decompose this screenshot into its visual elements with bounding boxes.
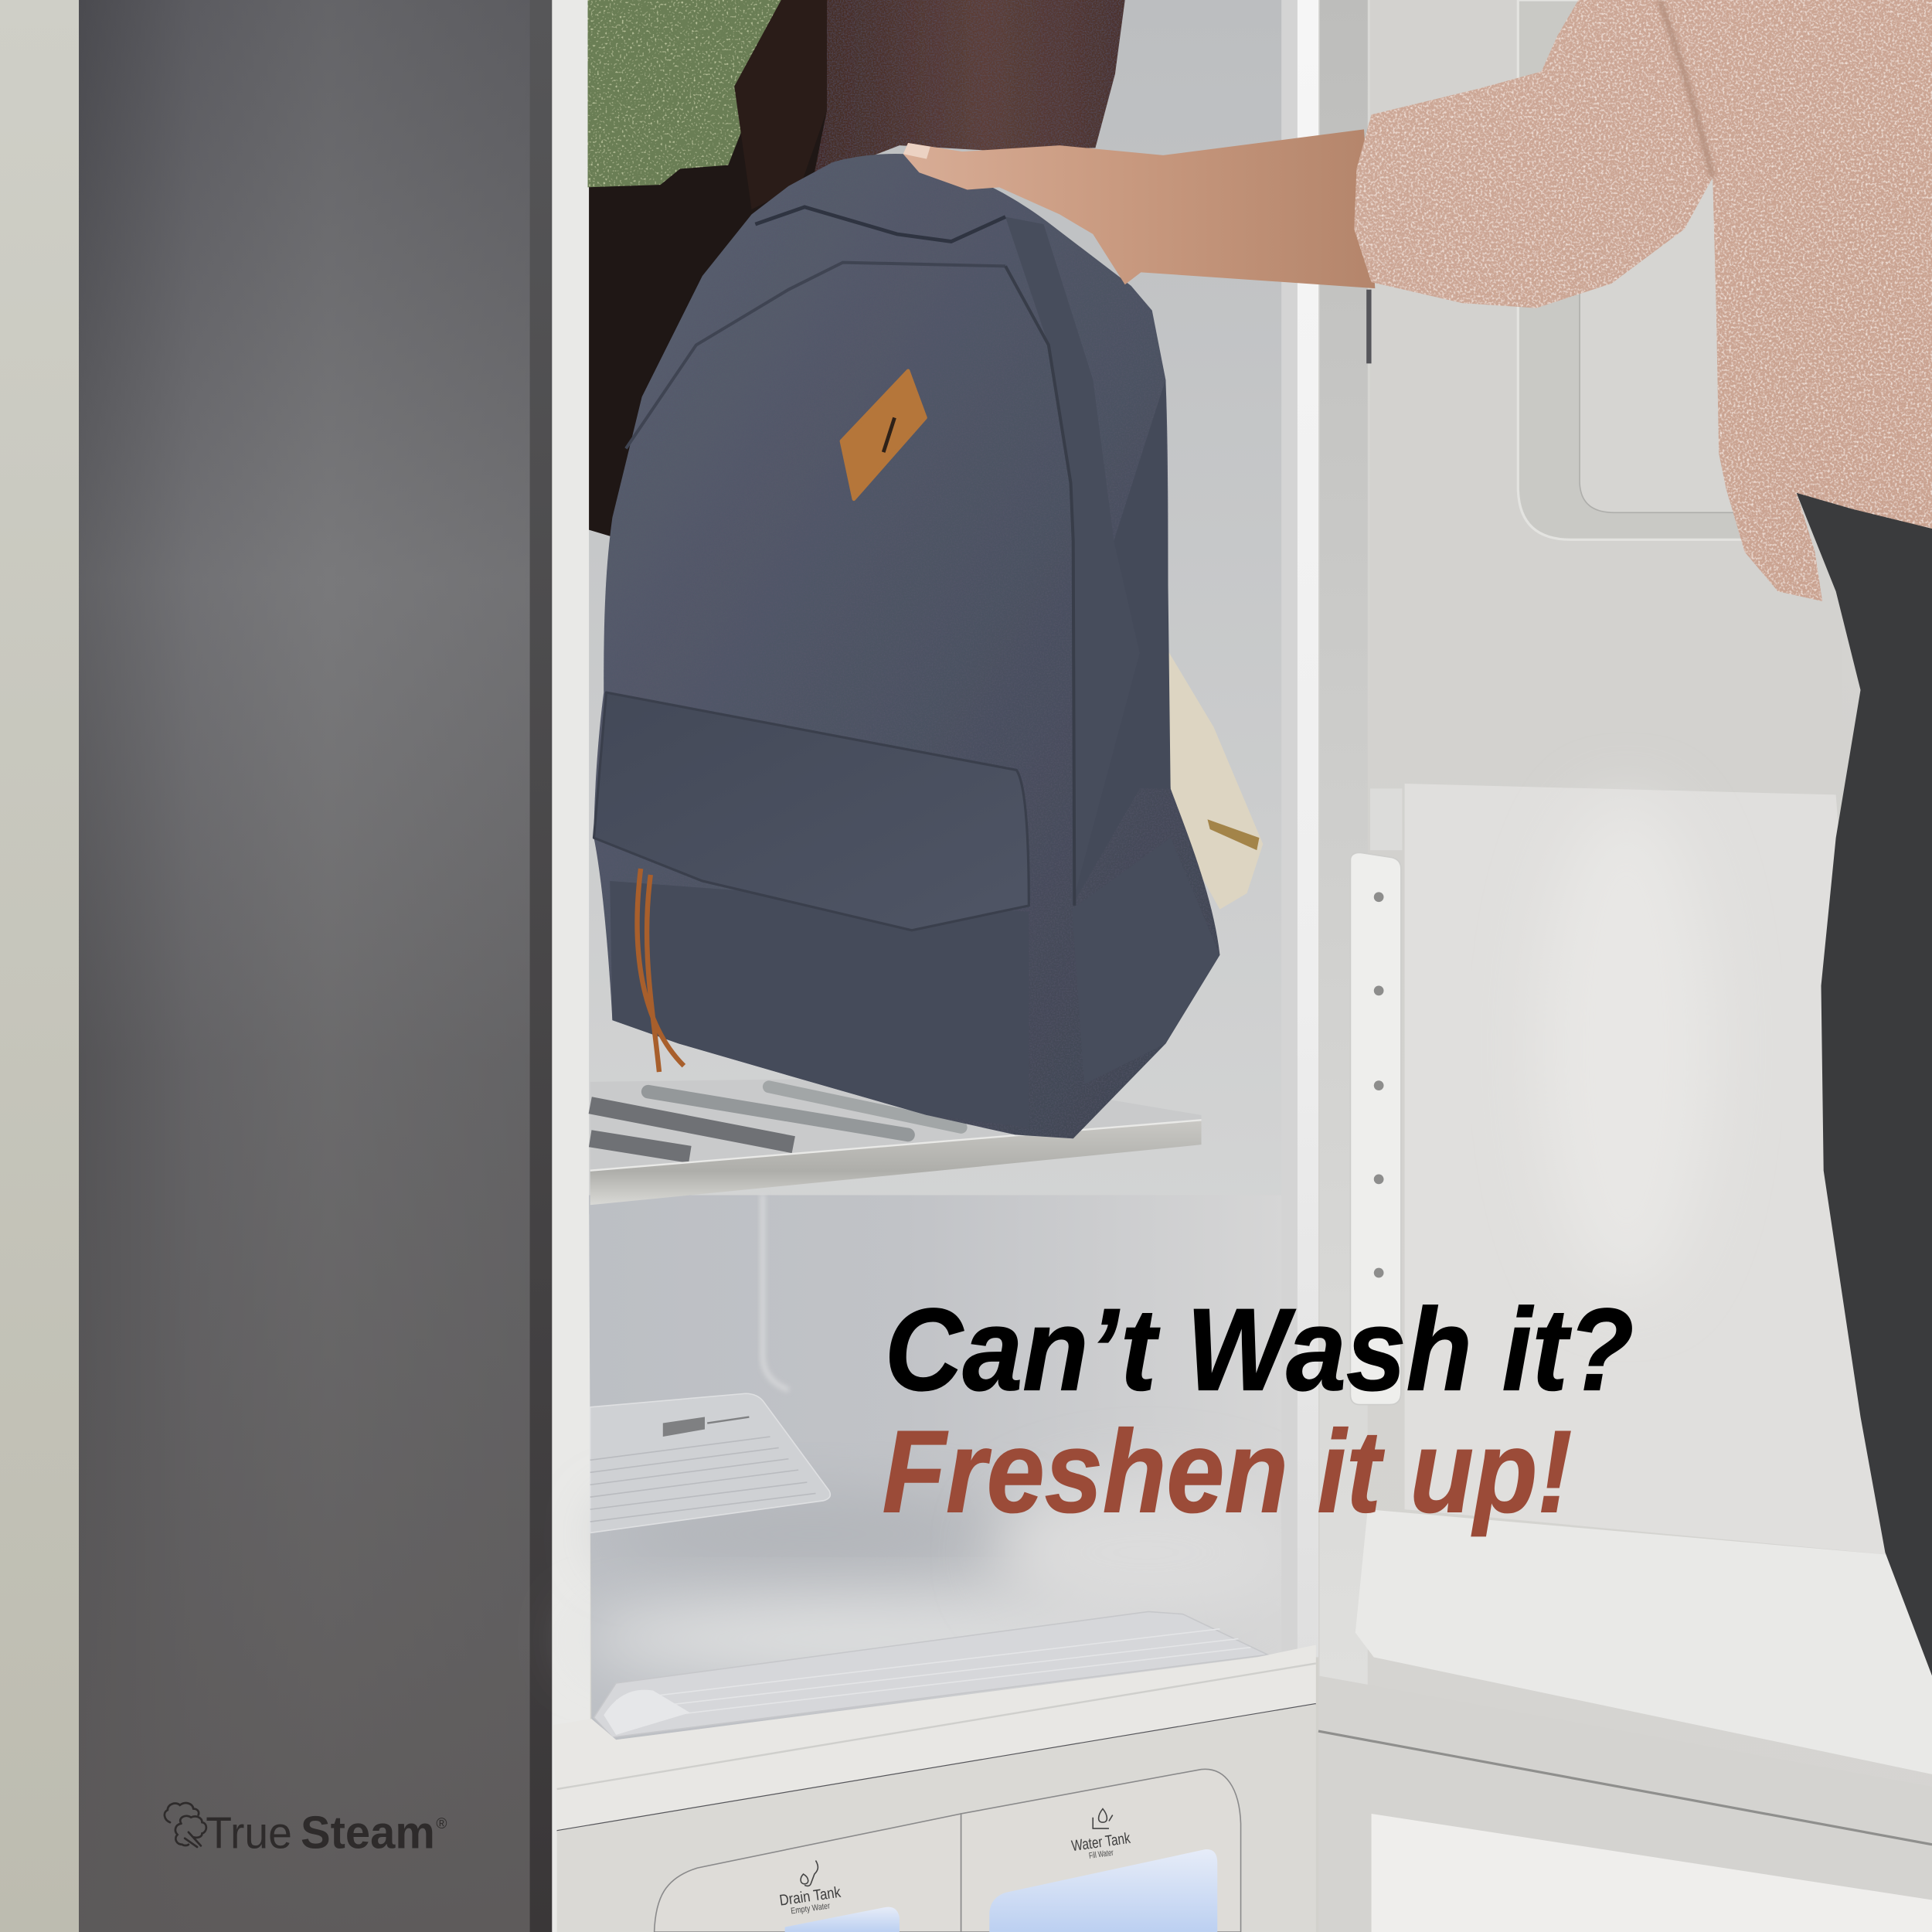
- strap seam: [1005, 266, 1074, 906]
- side panel shading: [1072, 379, 1171, 906]
- door tray: [1355, 1509, 1932, 1774]
- drain tank sublabel: Empty Water: [791, 1901, 831, 1916]
- sweater fold shading: [1660, 0, 1713, 178]
- panel: upper cabinet interior: [589, 0, 1289, 1213]
- door handle recess: [1518, 0, 1750, 539]
- logo: TrueSteam: ®: [436, 1816, 447, 1832]
- panel: lower cabinet interior: [579, 1194, 1294, 1740]
- thumbnail: [903, 143, 930, 159]
- brown leather jacket: [813, 0, 1125, 179]
- floor highlight: [579, 1602, 1146, 1675]
- logo: TrueSteam: [165, 1803, 447, 1859]
- side pocket: [1072, 838, 1219, 1084]
- panel: cabinet frame strip: [552, 0, 590, 1932]
- front panel seam: [626, 263, 1005, 448]
- headline line 1: Can’t Wash it?: [885, 1284, 1634, 1415]
- backpack: [594, 154, 1263, 1138]
- brand wordmark: True: [206, 1809, 292, 1859]
- right floor light: [998, 1478, 1294, 1627]
- icon: steam cloud: [165, 1803, 206, 1847]
- lower door panel: [1405, 784, 1891, 1555]
- brass buckle: [1207, 819, 1259, 850]
- upper door bin: [1370, 0, 1842, 794]
- green jacket: [588, 0, 781, 187]
- panel: front sill: [553, 1645, 1316, 1831]
- leather patch: [842, 371, 925, 499]
- panel: water and drain tank controls: [557, 1704, 1316, 1932]
- panel: drain tank: [655, 1814, 961, 1932]
- canvas strap: [1152, 634, 1263, 910]
- lower door drawer: [1372, 1814, 1932, 1932]
- main body: [594, 154, 1219, 1138]
- front pocket: [610, 881, 1029, 1128]
- leather dark edge: [734, 0, 827, 209]
- back corner seam: [763, 1194, 788, 1389]
- jeans: [1797, 493, 1932, 1675]
- water tank label: Water Tank: [1070, 1830, 1131, 1855]
- shoulder strap shading: [1005, 217, 1140, 906]
- drain tray: [594, 1611, 1268, 1737]
- headline line 2: Freshen it up!: [883, 1406, 1572, 1537]
- wall: [0, 0, 81, 1932]
- pocket flap: [594, 692, 1029, 930]
- sweater: [1354, 0, 1932, 601]
- panel: water tank: [961, 1769, 1241, 1932]
- lower door ledge: [1318, 1675, 1932, 1932]
- drawcord: [638, 869, 684, 1072]
- drain tank label: Drain Tank: [778, 1884, 842, 1910]
- interior right trim: [1281, 0, 1320, 1657]
- panel: closed-side dark door: [79, 0, 553, 1932]
- floor shadow: [604, 1492, 1022, 1576]
- dark garment: [589, 0, 862, 537]
- zipper: [755, 207, 1005, 241]
- panel: open door: [1318, 0, 1932, 1932]
- logo: TrueSteam: Steam: [301, 1808, 435, 1859]
- icon: drain drop: [801, 1861, 818, 1886]
- info card: [590, 1393, 830, 1532]
- arm and hand: [903, 129, 1375, 288]
- shelf rack: [590, 1077, 1202, 1205]
- water tank sublabel: Fill Water: [1088, 1849, 1114, 1861]
- door hinge strip: [1350, 290, 1402, 1405]
- icon: water tank drop: [1093, 1809, 1113, 1828]
- door panel highlight: [1540, 801, 1713, 1294]
- headline: [883, 1284, 1634, 1537]
- clothes on hangers: [588, 0, 1125, 537]
